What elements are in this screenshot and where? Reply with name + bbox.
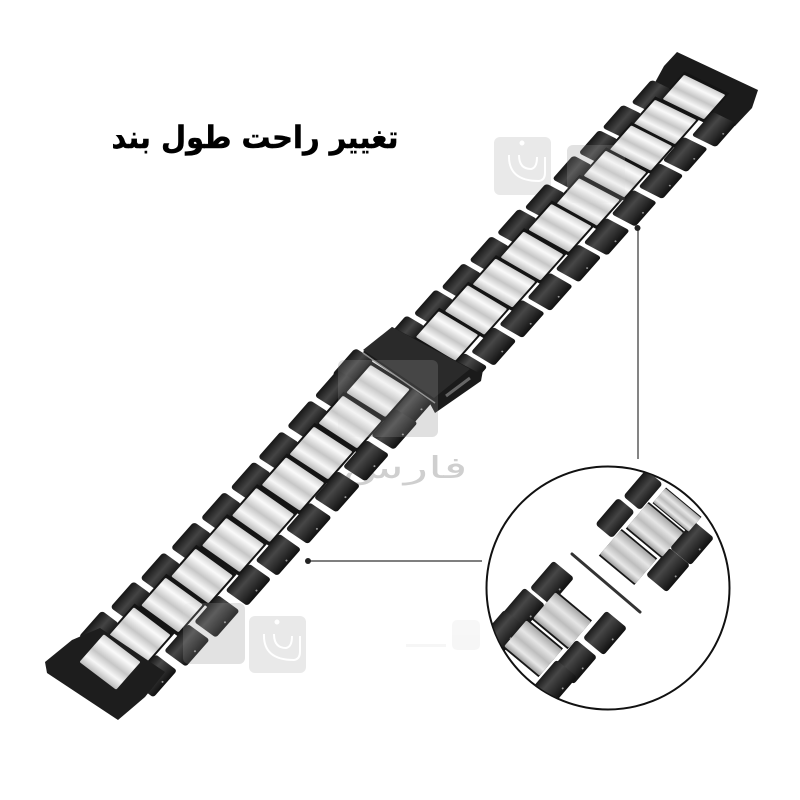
last silver link xyxy=(79,634,141,690)
lower links xyxy=(76,348,436,698)
title: تغییر راحت طول بند xyxy=(112,120,398,156)
callout line: vertical xyxy=(634,225,640,459)
watermark: app logo tiles xyxy=(183,137,625,673)
upper link segment xyxy=(595,470,714,592)
inset: detail of removable links xyxy=(481,466,730,710)
callout line: horizontal xyxy=(305,558,482,564)
watermark overlay across the band xyxy=(183,145,625,664)
upper links xyxy=(382,63,753,392)
lower link segment xyxy=(492,562,626,698)
watermark: faint inset logo xyxy=(406,620,480,650)
watch band xyxy=(45,52,758,720)
bottom end piece xyxy=(45,628,165,720)
watermark: brand text: فارس xyxy=(342,451,468,486)
clasp xyxy=(363,327,483,413)
inset circle xyxy=(486,466,730,710)
top end piece xyxy=(652,52,758,126)
connecting pin xyxy=(572,554,640,612)
